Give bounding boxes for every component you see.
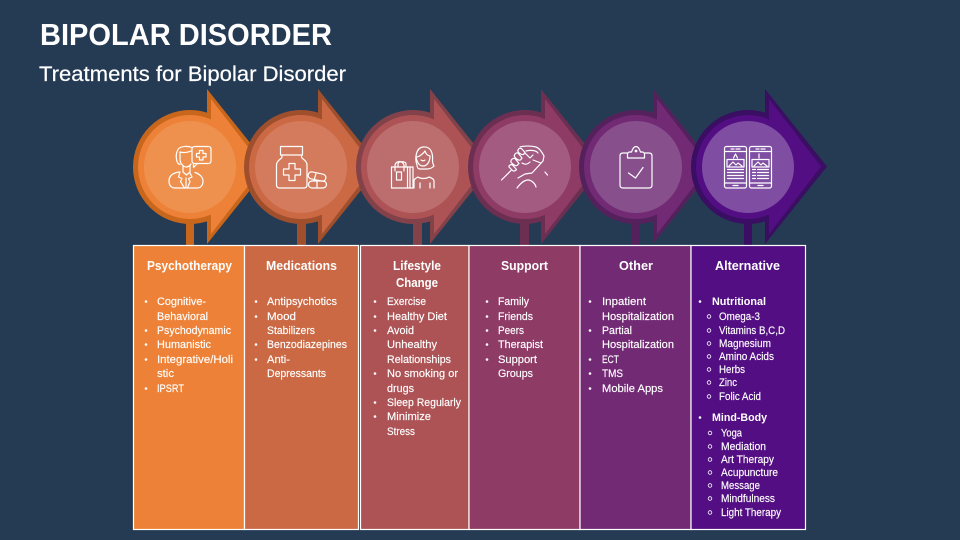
panel: lifestyle change: [360, 246, 469, 530]
panel: psychotherapy: Psychodynamic: [157, 325, 232, 337]
icon: woman with shopping bag: [392, 147, 434, 188]
panel: alternative: Art Therapy: [721, 454, 775, 466]
panel: other: Other: [619, 259, 653, 273]
panel: lifestyle change: No smoking or: [387, 368, 458, 380]
panel: alternative: Zinc: [719, 377, 738, 389]
panel: support: Friends: [498, 311, 534, 323]
panel: support: Family: [498, 296, 530, 308]
panel: lifestyle change: Lifestyle: [393, 259, 441, 273]
panel: psychotherapy: Integrative/Holi: [157, 354, 233, 366]
panel: lifestyle change: Healthy Diet: [387, 311, 447, 323]
panel: medications: Antipsychotics: [267, 296, 338, 308]
panel: medications: Depressants: [267, 368, 327, 380]
arrow circle: other: [579, 89, 715, 245]
arrow circle: support: [468, 89, 603, 245]
panel: psychotherapy: Cognitive-: [157, 296, 206, 308]
panel: other: [580, 246, 691, 530]
panel: alternative: Folic Acid: [719, 391, 761, 403]
panel: lifestyle change: Sleep Regularly: [387, 397, 462, 409]
panel: alternative: Light Therapy: [721, 507, 782, 519]
panel: alternative: Magnesium: [719, 338, 771, 350]
panel: psychotherapy: IPSRT: [157, 383, 184, 395]
panel: alternative: Herbs: [719, 364, 746, 376]
panel: psychotherapy: Psychotherapy: [147, 259, 232, 273]
panel: alternative: Yoga: [721, 428, 742, 440]
panel: lifestyle change: Avoid: [387, 325, 414, 337]
panel: other: TMS: [602, 368, 623, 380]
title: BIPOLAR DISORDER: [40, 17, 332, 52]
panel: alternative: [691, 246, 806, 530]
panel: support: Therapist: [498, 339, 543, 351]
panel: alternative: Amino Acids: [719, 351, 775, 363]
panel: psychotherapy: stic: [157, 368, 175, 380]
subtitle: Treatments for Bipolar Disorder: [39, 63, 346, 86]
panel: other: Partial: [602, 325, 632, 337]
panel: alternative: Message: [721, 480, 760, 492]
panel: medications: Mood: [267, 311, 296, 323]
panel: alternative: Alternative: [715, 259, 780, 273]
panel: lifestyle change: Change: [396, 276, 438, 290]
panel: other: Mobile Apps: [602, 383, 664, 395]
panel: alternative: Omega-3: [719, 311, 760, 323]
arrow circle: psychotherapy: [133, 89, 269, 245]
arrow circle: alternative: [691, 89, 827, 245]
panel: other: ECT: [602, 354, 619, 366]
panel: lifestyle change: Unhealthy: [387, 339, 438, 351]
panel: alternative: Mindfulness: [721, 493, 776, 505]
panel: support: Support: [498, 354, 537, 366]
panel: other: Hospitalization: [602, 339, 674, 351]
icon: medicine bottle and pills: [276, 146, 327, 188]
panel: psychotherapy: [134, 246, 244, 530]
panel: alternative: Acupuncture: [721, 467, 778, 479]
panel: other: Hospitalization: [602, 311, 674, 323]
icon: A/B mobile phones: [724, 146, 772, 188]
panel: medications: Stabilizers: [267, 325, 316, 337]
arrow circle: medications: [244, 89, 380, 245]
panel: support: Groups: [498, 368, 534, 380]
arrow circle: lifestyle change: [356, 89, 492, 245]
panel: support: Peers: [498, 325, 525, 337]
panel: psychotherapy: Humanistic: [157, 339, 212, 351]
icon: clipboard with check: [620, 146, 652, 188]
panel: lifestyle change: drugs: [387, 383, 415, 395]
panel: lifestyle change: Exercise: [387, 296, 426, 308]
icon: doctor with medical speech bubble: [169, 146, 211, 188]
panel: medications: Anti-: [267, 354, 290, 366]
panel: alternative: Nutritional: [712, 296, 766, 308]
panel: lifestyle change: Relationships: [387, 354, 452, 366]
panel: psychotherapy: Behavioral: [157, 311, 208, 323]
panel: medications: Medications: [266, 259, 337, 273]
panel: alternative: Mind-Body: [712, 412, 767, 424]
panel: support: Support: [501, 259, 549, 273]
panel: lifestyle change: Minimize: [387, 411, 431, 423]
panel: support: [469, 246, 580, 530]
panel: medications: [244, 246, 358, 530]
panel: medications: Benzodiazepines: [267, 339, 348, 351]
panel: other: Inpatient: [602, 296, 646, 308]
icon: clasped hands: [502, 146, 548, 188]
panel: lifestyle change: Stress: [387, 426, 416, 438]
panel: alternative: Vitamins B,C,D: [719, 325, 785, 337]
panel: alternative: Mediation: [721, 441, 766, 453]
